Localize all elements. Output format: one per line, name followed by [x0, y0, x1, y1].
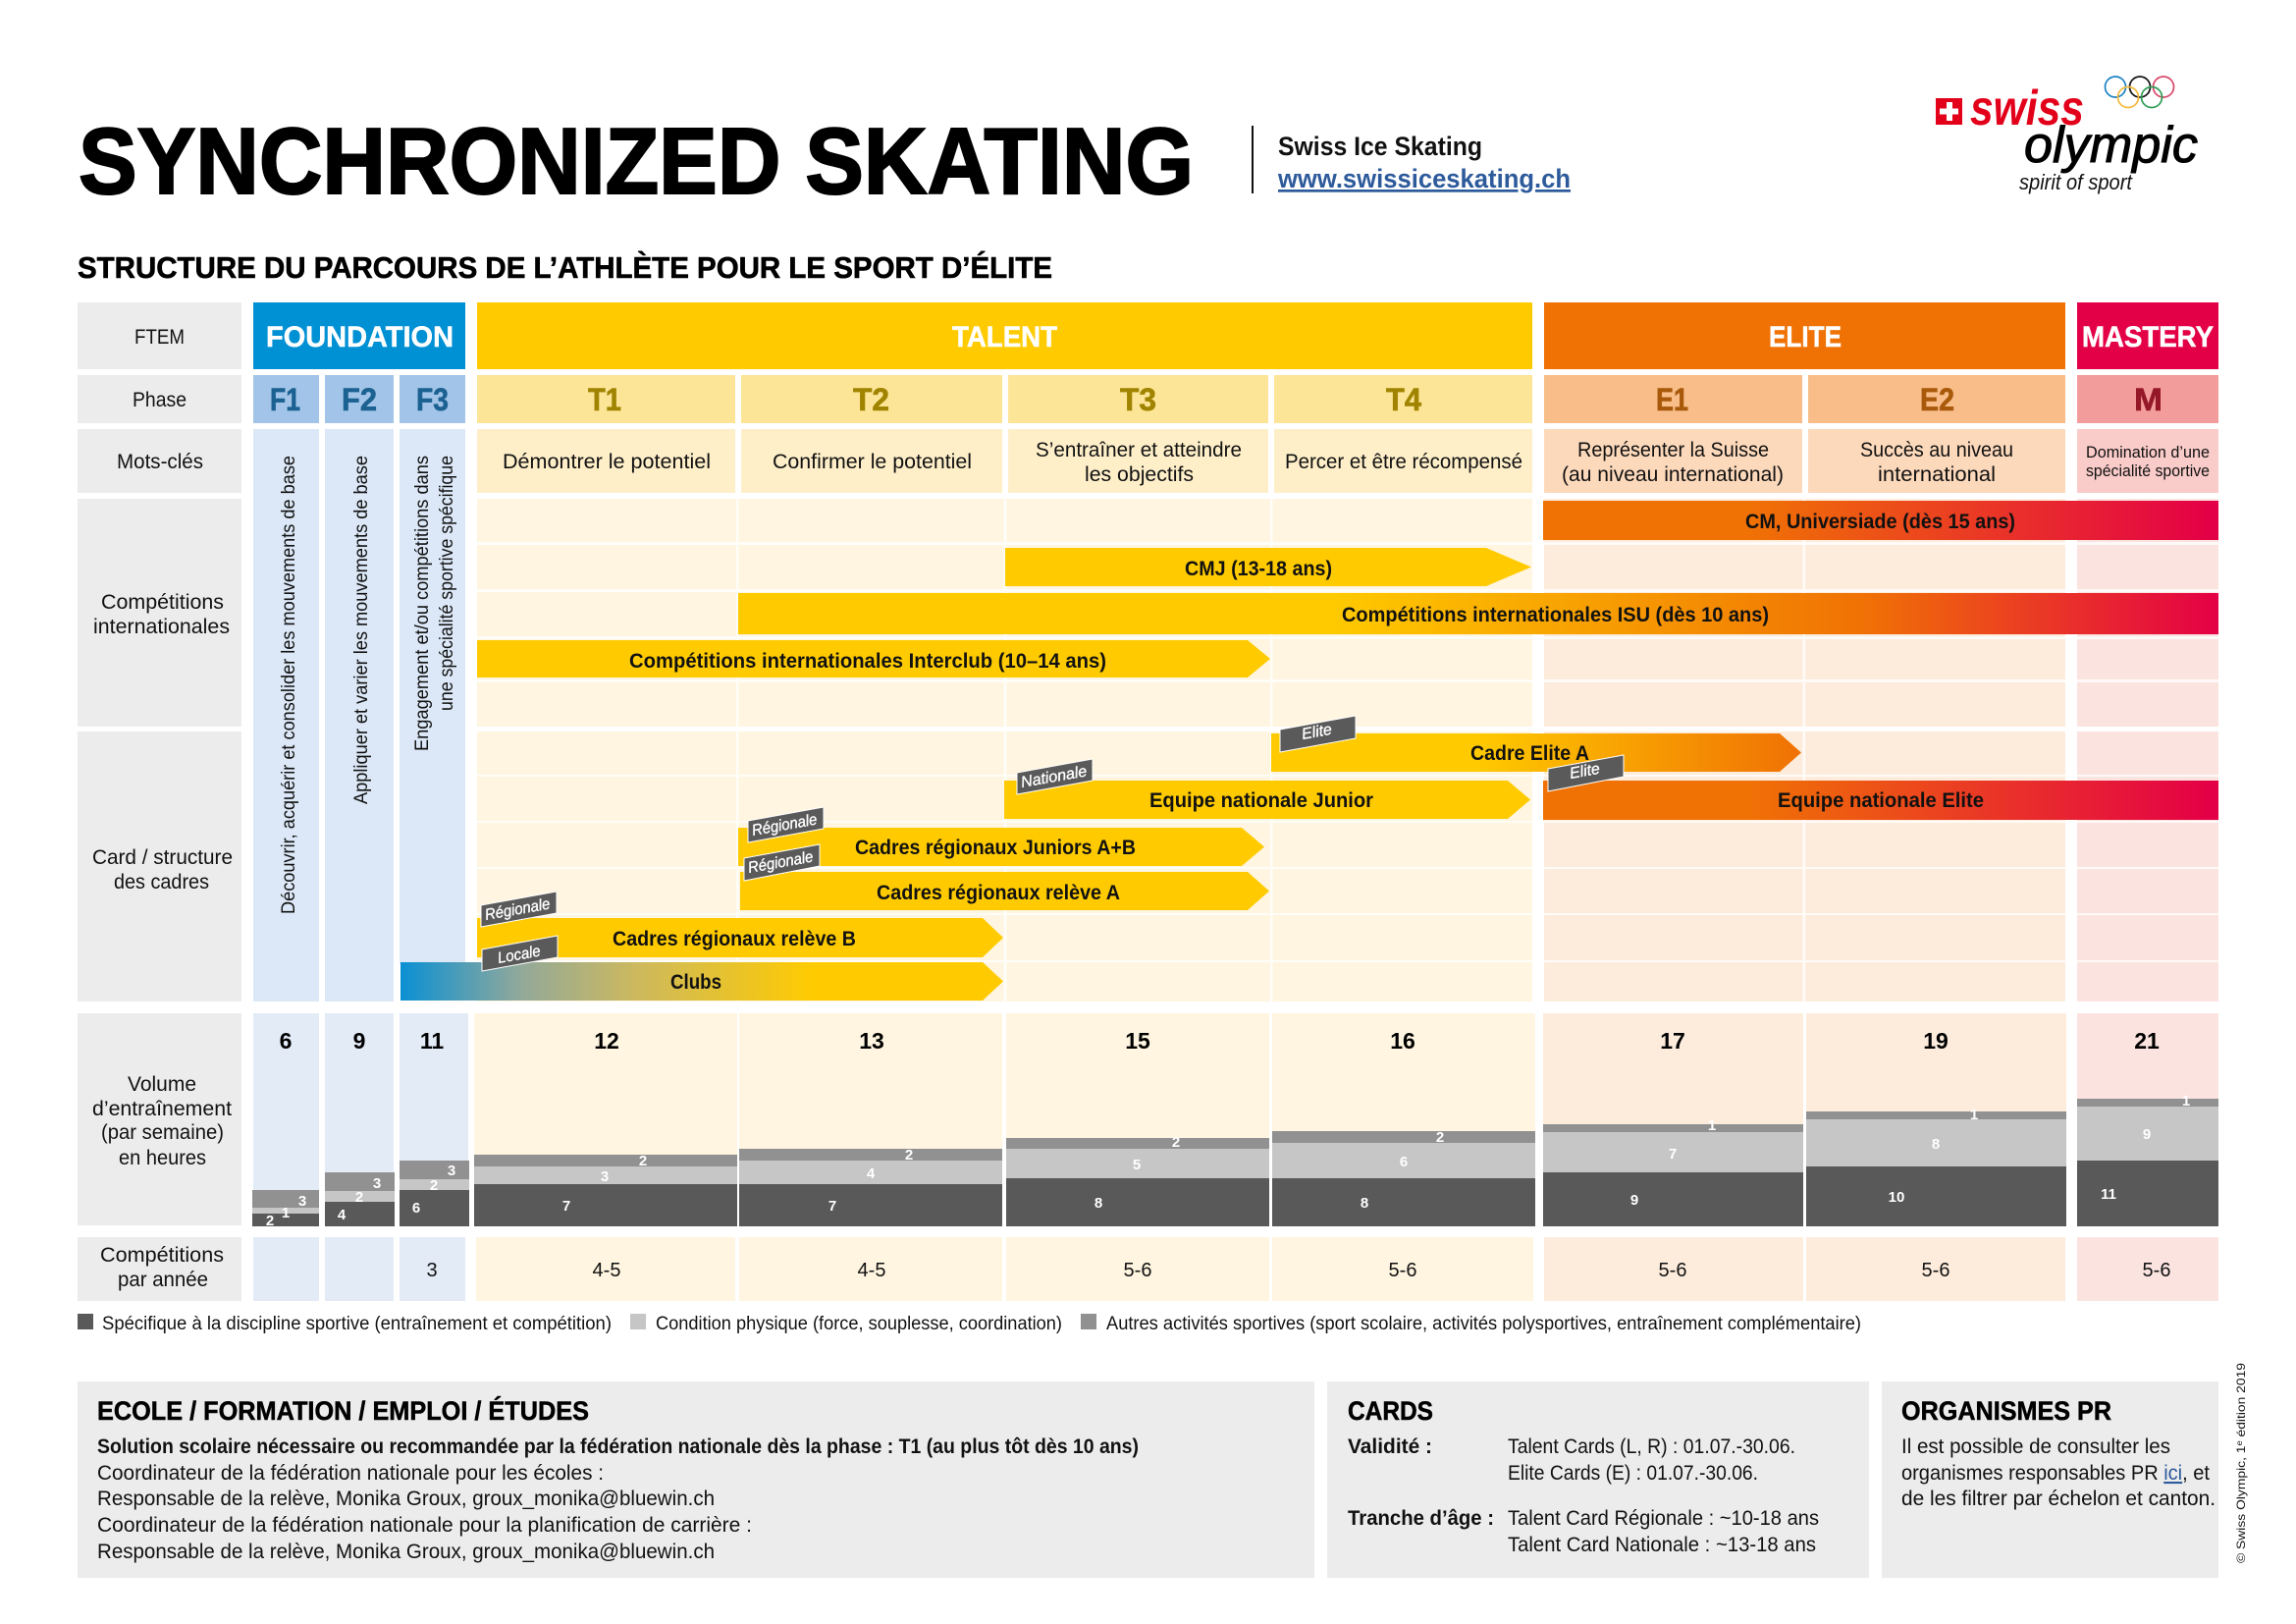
logo: Swiss Olympic: spirit of sport: [2019, 170, 2133, 194]
bar: CM, Universiade: [1543, 501, 2218, 540]
legend: [78, 1314, 1861, 1334]
panel: organismes PR: [1882, 1381, 2218, 1578]
row labels column: FTEM: [134, 326, 185, 349]
legend: Spécifique à la discipline sportive (entraînement et compétition): [102, 1314, 612, 1334]
title: SYNCHRONIZED SKATING: [79, 109, 1194, 214]
FTEM header row: ELITE: [1769, 321, 1842, 353]
bar T3: 8: [1095, 1195, 1102, 1212]
keywords row: (au niveau international): [1562, 463, 1784, 486]
federation block: www.swissiceskating.ch: [1277, 164, 1571, 193]
competitions per year row: 4-5: [593, 1260, 620, 1281]
panel: cards: Talent Card Nationale : ~13-18 ans: [1508, 1534, 1816, 1556]
phase row: E1: [1656, 382, 1688, 417]
arrow: CMJ: [1005, 548, 1531, 586]
bar E1: 17: [1660, 1028, 1685, 1054]
arrow: Cadres régionaux relève B: [477, 918, 1003, 957]
tag: Régionale juniors: Régionale: [751, 812, 819, 839]
competitions per year row: 4-5: [858, 1260, 885, 1281]
competitions per year row: 5-6: [1389, 1260, 1416, 1281]
panel: organismes PR: ORGANISMES PR: [1901, 1396, 2111, 1426]
competitions per year row: 5-6: [1922, 1260, 1949, 1281]
bar F1: 2: [266, 1213, 274, 1229]
bar T1: [474, 1028, 737, 1226]
bar M: 1: [2182, 1093, 2190, 1110]
bar T4: 16: [1390, 1028, 1415, 1054]
phase row: T3: [1120, 382, 1156, 417]
phase row: F3: [416, 382, 449, 417]
bar F1: 3: [298, 1193, 306, 1210]
arrow: Cadres régionaux Juniors: [738, 828, 1264, 866]
bar T2: 13: [859, 1028, 884, 1054]
bar T1: 7: [562, 1198, 570, 1215]
bar: Equipe nationale Elite: [1543, 781, 2218, 820]
row labels column: Compétitions: [100, 1244, 224, 1267]
panel: école / formation: Solution scolaire nécessaire ou recommandée par la fédération nationale dès la phase : T1 (au plus tôt dès 10 ans): [97, 1435, 1139, 1458]
arrow: CMJ: CMJ (13-18 ans): [1185, 558, 1332, 580]
bar F3: 6: [412, 1200, 420, 1217]
tag: Régionale relève A: Régionale: [747, 849, 815, 877]
federation block: [1252, 126, 1571, 193]
bar E2: 1: [1970, 1107, 1978, 1123]
grid background: [477, 499, 2218, 1001]
row labels column: par année: [118, 1269, 208, 1291]
phase row: F1: [270, 382, 300, 417]
keywords row: les objectifs: [1085, 463, 1194, 486]
tag: Elite E1: [1548, 755, 1624, 791]
panel: cards: [1327, 1381, 1869, 1578]
keywords row: Succès au niveau: [1860, 439, 2013, 461]
bar T2: 4: [867, 1165, 876, 1182]
foundation keyword columns: [253, 429, 465, 1001]
arrow: Clubs: [400, 962, 1003, 1001]
bar F3: [400, 1028, 469, 1226]
tag: Elite T4: Elite: [1301, 722, 1333, 743]
federation block: Swiss Ice Skating: [1278, 132, 1482, 161]
panel: cards: Talent Cards (L, R) : 01.07.-30.06.: [1508, 1435, 1795, 1458]
competitions per year row: 5-6: [2143, 1260, 2170, 1281]
bar F1: 1: [282, 1205, 290, 1221]
competitions per year row: 5-6: [1124, 1260, 1151, 1281]
bar T3: 2: [1172, 1134, 1180, 1151]
arrow: Interclub: [477, 640, 1270, 677]
bar E1: 9: [1630, 1192, 1638, 1209]
keywords row: S’entraîner et atteindre: [1036, 439, 1242, 461]
phase row: T2: [853, 382, 889, 417]
row labels column: [78, 302, 241, 1301]
phase row: T1: [588, 382, 621, 417]
foundation keyword columns: Engagement et/ou compétitions dans: [412, 456, 433, 751]
row labels column: Card / structure: [92, 846, 233, 869]
bar T4: 2: [1436, 1129, 1444, 1146]
bar F2: 2: [355, 1189, 363, 1206]
bar E1: 1: [1708, 1117, 1716, 1134]
arrow: Cadres régionaux relève B: Cadres régionaux relève B: [613, 928, 856, 950]
logo: Swiss Olympic: [1936, 77, 2198, 194]
row labels column: Phase: [133, 389, 187, 411]
phase row: F2: [342, 382, 377, 417]
row labels column: Mots-clés: [117, 451, 203, 473]
logo: Swiss Olympic: olympic: [2024, 117, 2198, 174]
bar: ISU: Compétitions internationales ISU (dès 10 ans): [1342, 604, 1769, 626]
keywords row: spécialité sportive: [2086, 462, 2210, 480]
keywords row: Percer et être récompensé: [1285, 451, 1522, 473]
bar: CM, Universiade: CM, Universiade (dès 15 ans): [1745, 511, 2015, 533]
row labels column: d’entraînement: [92, 1098, 232, 1120]
FTEM header row: TALENT: [952, 321, 1057, 353]
legend: Autres activités sportives (sport scolaire, activités polysportives, entraînement complémentaire): [1106, 1314, 1861, 1334]
phase row: M: [2134, 382, 2163, 417]
competitions per year row: 5-6: [1659, 1260, 1686, 1281]
bar F3: 3: [448, 1163, 455, 1179]
logo: Swiss Olympic: swiss: [1970, 81, 2084, 135]
bar E2: 8: [1932, 1136, 1940, 1153]
panel: cards: Tranche d’âge :: [1348, 1507, 1494, 1530]
row labels column: (par semaine): [101, 1121, 224, 1144]
tag: Régionale relève B: Régionale: [484, 896, 552, 924]
bar M: 21: [2134, 1028, 2160, 1054]
panel: école / formation: [78, 1381, 1314, 1578]
panel: organismes PR: organismes responsables PR ici, et: [1901, 1462, 2210, 1485]
bar M: 9: [2143, 1126, 2151, 1143]
panel: cards: CARDS: [1348, 1396, 1433, 1426]
bar T3: 5: [1133, 1157, 1141, 1173]
FTEM header row: FOUNDATION: [266, 321, 454, 353]
bar F2: [325, 1028, 395, 1226]
bar F1: 6: [280, 1028, 292, 1054]
panel: cards: Elite Cards (E) : 01.07.-30.06.: [1508, 1462, 1758, 1485]
copyright: © Swiss Olympic, 1ᵉ édition 2019: [2234, 1363, 2248, 1563]
keywords row: international: [1878, 463, 1996, 486]
panel: organismes PR: de les filtrer par échelon et canton.: [1901, 1488, 2216, 1510]
panel: école / formation: ECOLE / FORMATION / EMPLOI / ÉTUDES: [97, 1395, 589, 1426]
arrow: Cadres régionaux relève A: [740, 872, 1269, 910]
arrow: Cadre Elite A: Cadre Elite A: [1470, 742, 1589, 765]
tag: Elite E1: Elite: [1569, 761, 1601, 783]
bar F2: 3: [373, 1175, 381, 1192]
bar T2: [739, 1028, 1002, 1226]
panel: organismes PR: Il est possible de consulter les: [1901, 1435, 2170, 1458]
panel: cards: Talent Card Régionale : ~10-18 ans: [1508, 1507, 1819, 1530]
bar M: 11: [2101, 1186, 2116, 1203]
tag: Nationale: Nationale: [1020, 763, 1089, 791]
bar T1: 12: [594, 1028, 619, 1054]
bar E1: [1543, 1028, 1803, 1226]
arrow: Cadres régionaux Juniors: Cadres régionaux Juniors A+B: [855, 837, 1136, 859]
panel: école / formation: Responsable de la relève, Monika Groux, groux_monika@bluewin.ch: [97, 1541, 715, 1563]
keywords row: [477, 429, 2218, 493]
arrow: Cadres régionaux relève A: Cadres régionaux relève A: [877, 882, 1120, 904]
row labels column: internationales: [93, 616, 230, 638]
bar: Equipe nationale Elite: Equipe nationale Elite: [1778, 789, 1984, 812]
bar F3: 2: [430, 1177, 438, 1194]
phase row: T4: [1386, 382, 1421, 417]
subtitle: STRUCTURE DU PARCOURS DE L’ATHLÈTE POUR LE SPORT D’ÉLITE: [78, 250, 1052, 285]
bar F3: 11: [420, 1028, 444, 1054]
keywords row: Représenter la Suisse: [1577, 439, 1769, 461]
row labels column: des cadres: [114, 871, 209, 893]
bar F1: [252, 1028, 319, 1229]
bar F2: 9: [353, 1028, 365, 1054]
foundation keyword columns: Découvrir, acquérir et consolider les mouvements de base: [279, 456, 299, 914]
bar: ISU: [738, 593, 2218, 634]
row labels column: en heures: [119, 1147, 206, 1169]
bar T1: 3: [601, 1168, 609, 1185]
panel: école / formation: Coordinateur de la fédération nationale pour les écoles :: [97, 1462, 604, 1485]
keywords row: Domination d’une: [2086, 444, 2210, 461]
bar F2: 4: [338, 1207, 347, 1223]
bar E1: 7: [1669, 1146, 1677, 1163]
bar T2: 7: [828, 1198, 836, 1215]
competitions per year row: 3: [426, 1260, 438, 1281]
competitions per year row: [253, 1237, 2218, 1301]
row labels column: Compétitions: [101, 591, 224, 614]
tag: Elite T4: [1280, 716, 1356, 752]
legend: Condition physique (force, souplesse, coordination): [656, 1314, 1062, 1334]
bar T2: 2: [905, 1147, 913, 1164]
row labels column: Volume: [128, 1073, 196, 1096]
tag: Locale: Locale: [497, 944, 542, 967]
bar E2: 19: [1923, 1028, 1949, 1054]
foundation keyword columns: Appliquer et varier les mouvements de base: [351, 456, 372, 804]
bar T3: 15: [1125, 1028, 1150, 1054]
panel: école / formation: Responsable de la relève, Monika Groux, groux_monika@bluewin.ch: [97, 1488, 715, 1510]
foundation keyword columns: une spécialité sportive spécifique: [437, 456, 457, 711]
bar T4: 6: [1400, 1154, 1408, 1170]
bar E2: [1806, 1028, 2066, 1226]
FTEM header row: [253, 302, 2218, 369]
arrow: Equipe nationale Junior: [1004, 781, 1530, 819]
phase row: E2: [1920, 382, 1954, 417]
arrow: Equipe nationale Junior: Equipe nationale Junior: [1149, 789, 1373, 812]
bar M: [2077, 1028, 2218, 1226]
arrow: Interclub: Compétitions internationales Interclub (10–14 ans): [629, 650, 1106, 673]
panel: école / formation: Coordinateur de la fédération nationale pour la planification de carrière :: [97, 1514, 752, 1537]
bar T4: 8: [1361, 1195, 1368, 1212]
bar T4: [1272, 1028, 1535, 1226]
panel: cards: Validité :: [1348, 1435, 1432, 1458]
bar T1: 2: [639, 1153, 647, 1169]
chart: training volume: [252, 1013, 2218, 1229]
keywords row: Confirmer le potentiel: [773, 451, 972, 473]
arrow: Clubs: Clubs: [670, 971, 721, 994]
phase row: [253, 375, 2218, 423]
tag: Locale: [482, 936, 558, 971]
keywords row: Démontrer le potentiel: [503, 451, 711, 473]
FTEM header row: MASTERY: [2082, 321, 2214, 353]
arrow: Cadre Elite A: [1271, 733, 1801, 772]
bar E2: 10: [1889, 1189, 1904, 1206]
bar T3: [1006, 1028, 1269, 1226]
